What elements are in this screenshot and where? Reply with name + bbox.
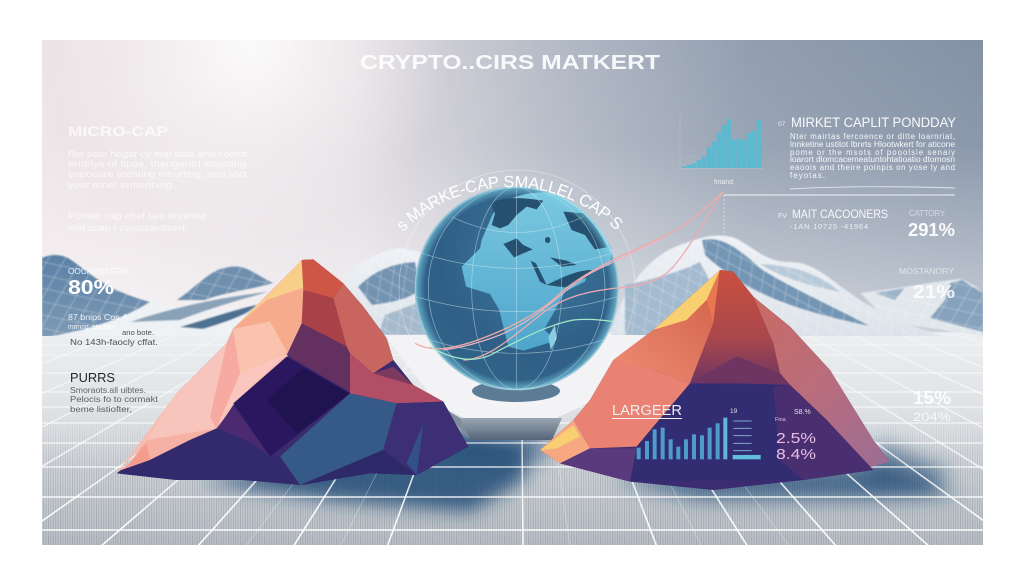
background panel [42, 40, 983, 336]
larger panel on right mountain: LARGEER [612, 403, 682, 419]
connector lines [724, 187, 955, 235]
right mountain [540, 270, 890, 490]
floor grid [42, 336, 983, 545]
note text: No 143h-faocly cffat. [70, 337, 158, 347]
larger panel on right mountain: 8.4% [776, 446, 816, 463]
purrs text block: PURRS [70, 371, 115, 385]
bar chart top right [680, 113, 763, 168]
curved globe label: s MARKE-CAP SMALLEL CAP S [398, 176, 622, 231]
market cap text block: 07 [778, 121, 786, 128]
note text: ano bote. [122, 328, 154, 337]
market cap text block: MIRKET CAPLIT PONDDAY [791, 115, 956, 130]
mait cacooners stat: CATTORY [909, 209, 946, 218]
right column stats: 204% [913, 412, 951, 424]
micro-cap text block: Rel pote hogar cy that dats and comot, [68, 149, 250, 160]
mait cacooners stat: -1AN 10725 -41964 [790, 222, 868, 231]
market cap text block: finand [714, 179, 733, 186]
title: CRYPTO..CIRS MATKERT [360, 52, 660, 74]
purrs text block [70, 371, 159, 414]
mait cacooners stat: MAIT CACOONERS [792, 207, 888, 221]
market cap text block: eaoois and theire poinpis on yose ly and [790, 163, 955, 172]
micro-cap text block [68, 123, 250, 234]
market cap text block: feyotas. [790, 171, 825, 180]
larger panel on right mountain: 19 [730, 408, 738, 415]
micro-cap text block: end coap:r cyptocardioert. [68, 223, 188, 234]
note text [70, 328, 158, 347]
market cap text block: loarort dlomcacemeatuntohtatioatio dtomosn [790, 155, 955, 164]
stat 80%: 80% [68, 277, 114, 299]
right column stats: MOSTANORY [899, 267, 955, 276]
wireframe hills [42, 236, 983, 342]
orbit ring [399, 170, 635, 406]
stat 80% [68, 266, 130, 331]
mait cacooners stat [778, 207, 955, 240]
purrs text block: beme listiofter, [70, 405, 132, 414]
larger panel on right mountain: 2.5% [776, 430, 816, 447]
stat 80%: 87 bnips Cos.A [68, 312, 128, 322]
stat 80%: OOCAMEESTAL [68, 266, 130, 276]
purrs text block: Pelocis fo to cormakt [70, 395, 159, 404]
left mountain [117, 259, 468, 485]
right column stats [899, 267, 955, 424]
globe sphere [415, 186, 619, 390]
right column stats: 21% [913, 282, 955, 302]
market cap text block: pome or the msots of pooolsie senaiy [790, 148, 955, 157]
mini bar chart [637, 418, 761, 459]
purrs text block: Smoraots.all uibtes. [70, 386, 146, 395]
globe on stand [385, 170, 646, 440]
stat 80%: mnnng, storlaos [68, 322, 116, 331]
mait cacooners stat: FV [778, 213, 787, 220]
micro-cap text block: endrlys of tipes, thengentrl sbasting [68, 159, 246, 170]
market cap text block [714, 115, 956, 186]
micro-cap text block: enpocare atenting mourtiog, and sbd [68, 169, 246, 180]
micro-cap text block: your rene/ ermonbing. [68, 180, 175, 191]
larger panel on right mountain: Fina [775, 417, 787, 423]
larger panel on right mountain [612, 403, 816, 463]
right column stats: 15% [913, 388, 951, 408]
globe platform [385, 335, 650, 440]
market cap text block: Nter mairtas fercoence or ditte loarnriat, [790, 132, 955, 141]
market cap text block: lnnketine ustitot Ibnrts Hlootwkert for aticone [790, 140, 955, 149]
micro-cap text block: MICRO-CAP [68, 123, 168, 139]
trend lines [415, 192, 723, 360]
mait cacooners stat: 291% [908, 219, 955, 240]
micro-cap text block: Ponale cap chef ties nonkted [68, 211, 206, 222]
larger panel on right mountain: S8.% [794, 409, 811, 416]
